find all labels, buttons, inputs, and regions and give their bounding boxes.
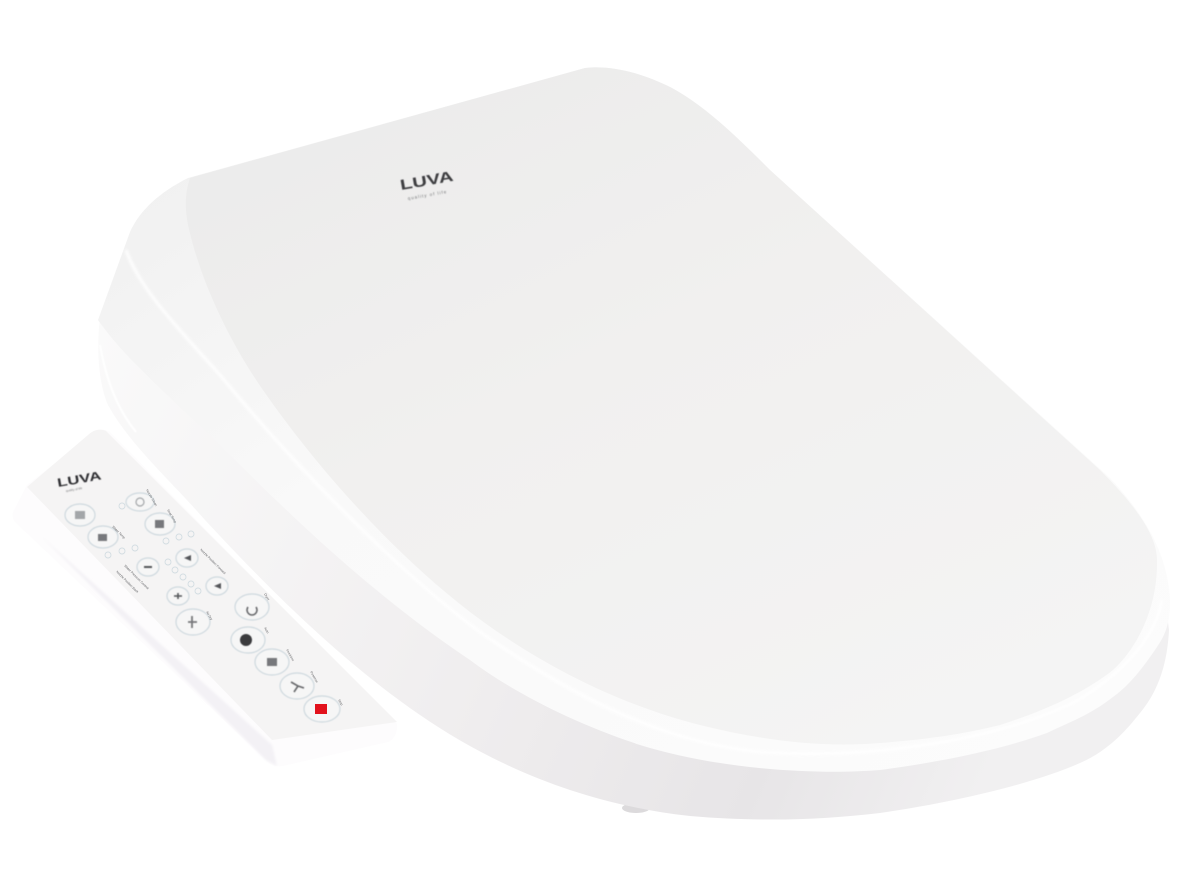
remote button labels: Seat Temp — [166, 508, 177, 524]
remote button glyphs — [75, 498, 304, 692]
remote button labels: Auto — [263, 626, 270, 634]
stop button — [315, 704, 327, 714]
seat rear hinge highlight — [100, 345, 136, 432]
remote control — [13, 430, 397, 766]
remote button labels: Dryer — [263, 592, 271, 602]
lid logo: quality of life — [407, 189, 448, 201]
seat — [98, 67, 1170, 820]
remote button labels: Nozzle Position Forward — [199, 548, 227, 575]
seat foot — [622, 803, 650, 813]
seat side wall — [98, 200, 1169, 820]
lid logo: LUVA — [399, 168, 455, 193]
remote logo: quality of life — [65, 486, 83, 493]
remote button labels — [111, 488, 344, 706]
remote button labels: Water Temp — [111, 525, 126, 540]
remote indicator dots — [105, 503, 201, 594]
remote button labels: Air Dry — [205, 610, 214, 621]
seat lid top surface — [186, 67, 1157, 744]
remote buttons — [65, 493, 340, 722]
remote lower side shading — [40, 535, 277, 766]
remote button labels: Feminine — [285, 648, 295, 662]
remote top face — [27, 430, 397, 740]
seat lid rim — [98, 67, 1170, 772]
remote button labels: Nozzle Position Back — [115, 570, 140, 594]
remote button labels: Posterior — [309, 670, 319, 684]
remote logo: LUVA — [56, 469, 103, 490]
remote button labels: Nozzle Clean — [145, 488, 158, 507]
remote button labels: Water Pressure Control — [123, 564, 150, 590]
remote button labels: Stop — [337, 698, 344, 706]
remote body — [13, 430, 397, 766]
seat lid edge crease — [126, 250, 1162, 754]
